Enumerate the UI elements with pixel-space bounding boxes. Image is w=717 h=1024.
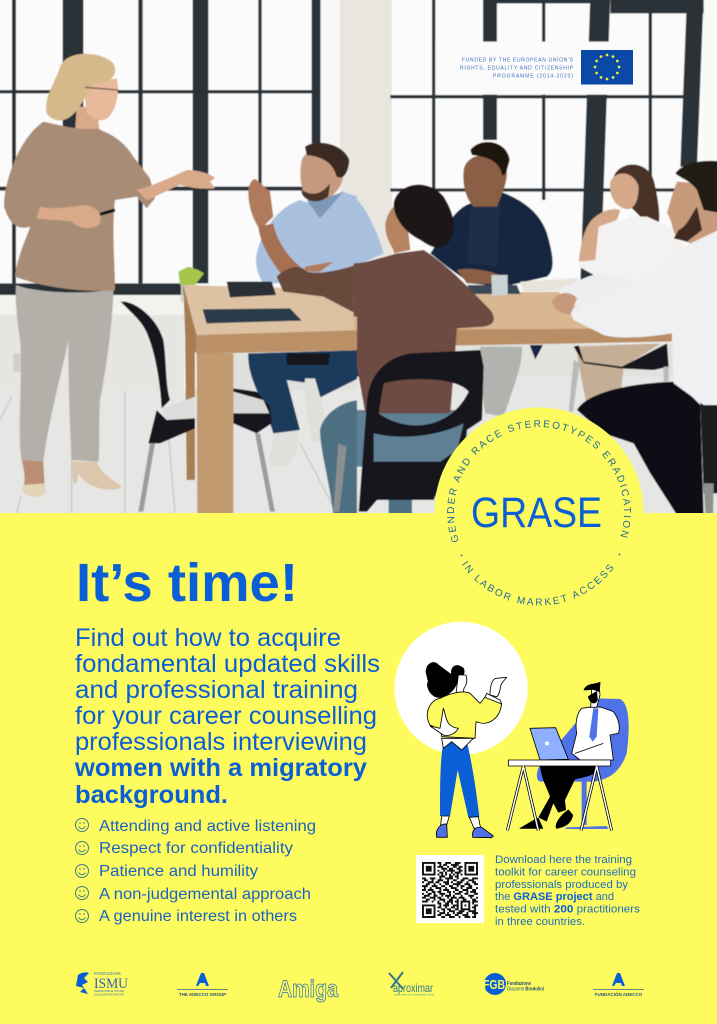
QR code (416, 855, 484, 923)
logo: The Adecco Group (177, 973, 228, 997)
photo: meeting around a table (0, 0, 717, 518)
funding notice with EU flag (460, 50, 633, 84)
funding text: PROGRAMME (2014-2020) (493, 74, 573, 80)
intro paragraph (74, 624, 380, 809)
logo: Fundación Adecco (593, 973, 644, 997)
download note: Download here the training (495, 854, 632, 866)
man at desk figure (507, 682, 629, 831)
funding text: RIGHTS, EQUALITY AND CITIZENSHIP (460, 66, 574, 72)
list item: Respect for confidentiality: Respect for confidentiality (99, 840, 293, 857)
funding text: FUNDED BY THE EUROPEAN UNION'S (462, 58, 574, 64)
logo: Aproximar: cooperativa de solidariedade social (394, 994, 434, 996)
list item: Attending and active listening: Attending and active listening (99, 818, 316, 835)
logo: Fundación Adecco: FUNDACIÓN ADECCO (595, 990, 643, 997)
list item: Patience and humility: Patience and humility (99, 863, 258, 880)
funding text (460, 58, 574, 80)
illustration: woman talking to man at desk (394, 622, 629, 838)
download note: in three countries. (495, 916, 585, 928)
photo left half: presenter and seated man (0, 0, 362, 515)
logo: Fondazione Giacomo Brodolini (483, 973, 545, 995)
badge text: bottom arc: IN LABOR MARKET ACCESS (462, 561, 614, 606)
logo: Fondazione ISMU: SULLA MULTIETNICITÀ (94, 992, 124, 996)
download note: toolkit for career counseling (495, 866, 636, 878)
logo: Aproximar: aproximar (393, 981, 433, 995)
badge text: top arc: GENDER AND RACE STEREOTYPES ERADICATION (447, 420, 631, 542)
skills list (76, 818, 316, 925)
woman figure (426, 663, 507, 838)
intro paragraph: professionals interviewing (75, 728, 367, 756)
logo: Aproximar (389, 972, 434, 996)
logo: Amiga: Amiga (278, 976, 339, 1003)
intro paragraph: women with a migratory (74, 754, 367, 782)
logo: Fondazione Giacomo Brodolini: Fondazione (507, 981, 531, 987)
yellow lower panel (0, 513, 717, 1024)
intro paragraph: background. (75, 781, 228, 809)
logo: Fondazione ISMU: FONDAZIONE (94, 971, 122, 976)
intro paragraph: for your career counselling (75, 702, 377, 730)
download note: the GRASE project and (495, 891, 614, 903)
list item: A genuine interest in others: A genuine interest in others (99, 908, 297, 925)
partner logos (76, 971, 644, 1003)
intro paragraph: fondamental updated skills (75, 650, 380, 678)
funding notice backdrop (435, 42, 647, 95)
download note: tested with 200 practitioners (495, 904, 641, 916)
photo right half: colleagues at the table (354, 0, 717, 515)
badge title: GRASE (471, 489, 602, 537)
intro paragraph: and professional training (75, 676, 358, 704)
logo: The Adecco Group: THE ADECCO GROUP (179, 992, 226, 997)
list item: A non-judgemental approach: A non-judgemental approach (99, 886, 311, 903)
intro paragraph: Find out how to acquire (75, 624, 341, 652)
logo: Fondazione ISMU (76, 971, 128, 996)
logo: Fondazione ISMU: INIZIATIVE E STUDI (94, 989, 124, 993)
logo: Fondazione Giacomo Brodolini: FGB (483, 977, 505, 992)
icon: EU flag (581, 50, 633, 84)
logo: Fondazione ISMU: ISMU (94, 976, 128, 992)
GRASE round badge (434, 408, 644, 606)
download note: professionals produced by (495, 879, 629, 891)
download note (495, 854, 641, 928)
logo: Fondazione Giacomo Brodolini: Giacomo Brodolini (507, 986, 545, 992)
heading: It’s time! (76, 553, 298, 613)
